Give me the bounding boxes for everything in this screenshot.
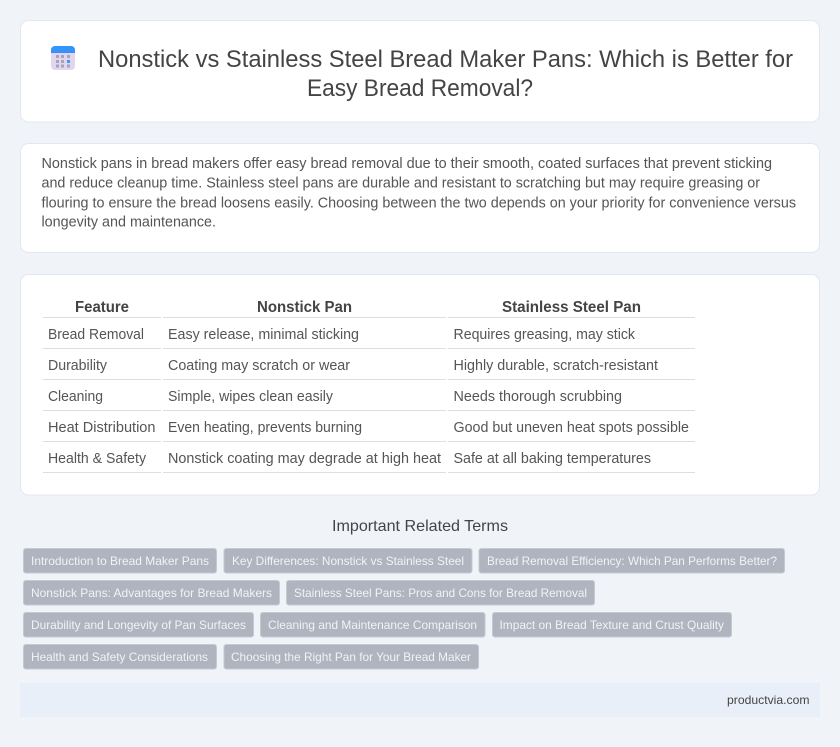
tag xyxy=(224,548,472,573)
tag xyxy=(24,644,216,669)
tag xyxy=(479,548,784,573)
row: bread removal: Easy release, minimal sticking xyxy=(168,327,359,343)
tag xyxy=(24,548,216,573)
tag: Health and Safety Considerations xyxy=(31,650,208,664)
row: durability: Durability xyxy=(48,358,108,374)
panel: comparison table xyxy=(20,274,820,495)
tag: Bread Removal Efficiency: Which Pan Performs Better? xyxy=(487,554,777,568)
row: bread removal xyxy=(48,327,636,343)
tag: Cleaning and Maintenance Comparison xyxy=(268,618,477,632)
tag xyxy=(260,612,485,637)
summary paragraph: longevity and maintenance. xyxy=(42,215,216,231)
footer: productvia.com xyxy=(727,693,810,707)
row: health and safety: Safe at all baking temperatures xyxy=(454,451,651,467)
tag xyxy=(224,644,478,669)
row: durability: Coating may scratch or wear xyxy=(168,358,350,374)
row: heat distribution xyxy=(48,420,689,436)
tag: Introduction to Bread Maker Pans xyxy=(31,554,209,568)
tags: related terms xyxy=(24,548,784,669)
row: durability xyxy=(48,358,658,374)
title xyxy=(98,46,793,102)
table header: Nonstick Pan xyxy=(257,299,352,316)
tag: Choosing the Right Pan for Your Bread Maker xyxy=(231,650,471,664)
row: heat distribution: Heat Distribution xyxy=(48,420,156,436)
row: cleaning: Simple, wipes clean easily xyxy=(168,389,334,405)
table header: Feature xyxy=(75,299,129,316)
tag: Key Differences: Nonstick vs Stainless Steel xyxy=(232,554,464,568)
tag xyxy=(492,612,732,637)
title: Easy Bread Removal? xyxy=(307,75,533,102)
tag xyxy=(286,580,594,605)
footer xyxy=(20,683,820,717)
row: durability: Highly durable, scratch-resistant xyxy=(454,358,658,374)
summary paragraph: flouring to ensure the bread loosens easily. Choosing between the two depends on your priority for convenience versus xyxy=(42,196,796,212)
tag xyxy=(24,580,280,605)
icon: calendar xyxy=(51,46,75,70)
tag: Impact on Bread Texture and Crust Quality xyxy=(500,618,724,632)
tag xyxy=(24,612,254,637)
title: Nonstick vs Stainless Steel Bread Maker Pans: Which is Better for xyxy=(98,46,793,73)
row: heat distribution: Even heating, prevents burning xyxy=(168,420,362,436)
row: health and safety xyxy=(48,451,651,467)
row: cleaning: Needs thorough scrubbing xyxy=(454,389,622,405)
row: heat distribution: Good but uneven heat spots possible xyxy=(454,420,689,436)
row: cleaning xyxy=(48,389,622,405)
tag: Stainless Steel Pans: Pros and Cons for Bread Removal xyxy=(294,586,587,600)
panel: summary xyxy=(20,144,820,252)
summary paragraph xyxy=(42,156,796,231)
table header: Stainless Steel Pan xyxy=(502,299,641,316)
heading: related terms: Important Related Terms xyxy=(332,518,508,535)
row: bread removal: Requires greasing, may stick xyxy=(454,327,636,343)
panel: title card xyxy=(20,20,820,122)
tag: Durability and Longevity of Pan Surfaces xyxy=(31,618,246,632)
row: bread removal: Bread Removal xyxy=(48,327,144,343)
row: health and safety: Nonstick coating may degrade at high heat xyxy=(168,451,441,467)
row: cleaning: Cleaning xyxy=(48,389,103,405)
tag: Nonstick Pans: Advantages for Bread Makers xyxy=(31,586,272,600)
summary paragraph: and reduce cleanup time. Stainless steel pans are durable and resistant to scratching but may require greasing or xyxy=(42,176,760,192)
summary paragraph: Nonstick pans in bread makers offer easy bread removal due to their smooth, coated surfaces that prevent sticking xyxy=(42,156,772,172)
row: health and safety: Health & Safety xyxy=(48,451,147,467)
table header xyxy=(75,299,641,316)
